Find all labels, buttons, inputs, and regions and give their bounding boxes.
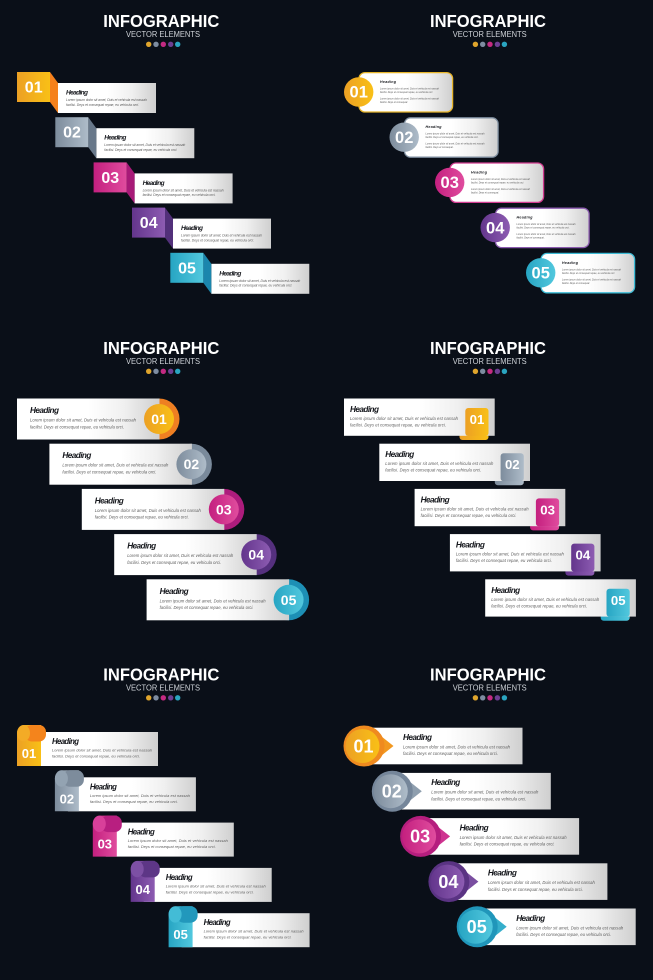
step 05: Lorem ipsum dolor sit amet, Duis et vehicula est nassah [204, 929, 304, 934]
step 02: facilisi. Deys et consequat repae, eu vehicula orci. [426, 136, 479, 139]
step 01: 01 [151, 411, 167, 427]
step 05: Lorem ipsum dolor sit amet, Duis et vehicula est nassah [160, 598, 266, 603]
panel: cards with scroll tabs [17, 664, 310, 947]
title block: INFOGRAPHIC [103, 664, 220, 684]
step 02: Heading [426, 125, 442, 129]
step 04: Lorem ipsum dolor sit amet, Duis et vehicula est nassah [488, 880, 596, 885]
step 05: 05 [532, 264, 550, 282]
step 03: facilisi. Deys et consequat repae, eu vehicula orci. [95, 515, 189, 520]
step 05: Heading [562, 261, 579, 265]
step 03: facilisi. Deys et consequat repae, eu vehicula orci. [460, 842, 555, 847]
step 01: Lorem ipsum dolor sit amet, Duis et vehicula est nassah [52, 748, 152, 752]
step 04: facilisi. Deys et consequat repae, eu vehicula orci. [516, 227, 570, 230]
step 02: Lorem ipsum dolor sit amet, Duis et vehicula est nassah [431, 790, 539, 795]
step 05: 05 [173, 927, 188, 942]
step 05: facilisi. Deys et consequat repae, eu vehicula orci. [562, 272, 615, 275]
step 02: facilisi. Deys et consequat repae, eu vehicula orci. [62, 469, 156, 474]
step 01 [344, 73, 453, 112]
step 04: Heading [181, 225, 203, 232]
step 05 [147, 579, 309, 620]
step 01: Lorem ipsum dolor sit amet, Duis et vehicula est nassah [350, 416, 459, 421]
step 02: facilisi. Deys et consequat. [426, 146, 454, 149]
step 04: 04 [248, 547, 264, 563]
step 03: 03 [441, 174, 459, 192]
step 05: Heading [204, 918, 231, 927]
step 01: 01 [350, 84, 368, 102]
title block [430, 11, 546, 47]
step 04: 04 [135, 882, 151, 897]
step 04: 04 [438, 872, 458, 892]
title block [103, 338, 220, 374]
step 04 [450, 534, 601, 576]
step 01: facilisi. Deys et consequat. [380, 101, 408, 104]
step 04: Lorem ipsum dolor sit amet, Duis et vehicula est nassah [516, 223, 576, 226]
step 04: Heading [127, 542, 156, 551]
title block: INFOGRAPHIC [103, 338, 220, 358]
step 02 [49, 444, 212, 485]
step 03 [435, 163, 544, 202]
step 05: 05 [281, 592, 297, 608]
step 01: Heading [30, 406, 59, 415]
title block: VECTOR ELEMENTS [453, 684, 527, 692]
step 05: facilisi. Deys et consequat repae, eu vehicula orci. [516, 932, 611, 937]
title block [103, 11, 220, 47]
step 05: Heading [491, 586, 520, 595]
step 05 [170, 253, 309, 294]
step 05 [457, 906, 636, 947]
step 02: Heading [431, 778, 460, 787]
step 01: Lorem ipsum dolor sit amet, Duis et vehicula est nassah [403, 744, 511, 750]
step 04: Lorem ipsum dolor sit amet, Duis et vehicula est nassah [127, 553, 234, 558]
title block: VECTOR ELEMENTS [126, 357, 200, 366]
step 01 [344, 726, 522, 766]
step 05: Lorem ipsum dolor sit amet, Duis et vehicula est nassah [516, 925, 624, 930]
step 01: Heading [350, 405, 379, 414]
step 03 [94, 162, 233, 203]
step 05 [169, 906, 310, 947]
step 04: Heading [166, 873, 193, 882]
step 03: Heading [421, 495, 450, 504]
step 03 [400, 816, 579, 857]
step 02: Heading [90, 782, 117, 791]
step 04: Lorem ipsum dolor sit amet, Duis et vehicula est nassah [516, 233, 576, 236]
step 02: Lorem ipsum dolor sit amet, Duis et vehicula est nassah [104, 143, 185, 147]
step 01: facilisi. Deys et consequat repae, eu vehicula orci. [350, 422, 446, 428]
step 05: facilisi. Deys et consequat repae, eu vehicula orci. [204, 935, 292, 940]
step 03: Heading [471, 170, 488, 174]
step 02: 02 [505, 457, 520, 472]
step 04: Heading [488, 869, 517, 878]
panel: stepped ribbon infographic [17, 11, 309, 294]
title block [103, 664, 220, 700]
step 01: Lorem ipsum dolor sit amet, Duis et vehicula est nassah [30, 418, 137, 422]
step 02 [390, 118, 498, 157]
title block: INFOGRAPHIC [430, 11, 546, 31]
step 03: Lorem ipsum dolor sit amet, Duis et vehicula est nassah [471, 178, 531, 181]
step 04: Heading [516, 216, 533, 220]
step 03: Lorem ipsum dolor sit amet, Duis et vehicula est nassah [421, 506, 529, 511]
step 04: facilisi. Deys et consequat repae, eu vehicula orci. [166, 889, 254, 894]
step 03: Lorem ipsum dolor sit amet, Duis et vehicula est nassah [460, 835, 567, 840]
step 01: facilisi. Deys et consequat repae, eu vehicula orci. [30, 424, 124, 429]
step 05: Lorem ipsum dolor sit amet, Duis et vehicula est nassah [562, 268, 622, 271]
title block: VECTOR ELEMENTS [126, 30, 200, 39]
step 03: facilisi. Deys et consequat repae, eu vehicula orci. [128, 844, 216, 849]
step 03: 03 [410, 827, 430, 847]
step 03: Heading [95, 496, 124, 505]
step 01: Heading [52, 737, 79, 746]
step 02 [372, 771, 551, 812]
step 04: facilisi. Deys et consequat repae, eu vehicula orci. [488, 887, 583, 892]
step 04 [132, 208, 271, 249]
step 03: Heading [128, 828, 155, 837]
step 03 [82, 489, 244, 530]
step 05: Lorem ipsum dolor sit amet, Duis et vehicula est nassah [562, 278, 622, 281]
step 05: 05 [467, 917, 487, 937]
panel: cards with rounded tag badges [344, 338, 636, 621]
step 01: 01 [22, 746, 36, 761]
step 01: Heading [380, 80, 397, 84]
step 03: facilisi. Deys et consequat. [471, 191, 499, 194]
step 05: facilisi. Deys et consequat. [562, 282, 590, 285]
step 02: facilisi. Deys et consequat repae, eu vehicula orci. [90, 799, 178, 804]
step 04: Lorem ipsum dolor sit amet, Duis et vehicula est nassah [181, 234, 262, 238]
step 01: facilisi. Deys et consequat repae, eu vehicula orci. [66, 103, 139, 107]
step 01: Lorem ipsum dolor sit amet, Duis et vehicula est nassah [380, 88, 440, 90]
step 02: facilisi. Deys et consequat repae, eu vehicula orci. [104, 148, 177, 152]
step 04: Lorem ipsum dolor sit amet, Duis et vehicula est nassah [166, 883, 266, 888]
step 03: Lorem ipsum dolor sit amet, Duis et vehicula est nassah [128, 838, 228, 843]
step 05: 05 [611, 593, 626, 608]
step 05: facilisi. Deys et consequat repae, eu vehicula orci. [491, 603, 587, 608]
step 03: Lorem ipsum dolor sit amet, Duis et vehicula est nassah [471, 188, 531, 191]
step 02: 02 [63, 125, 81, 142]
step 03: Heading [143, 180, 165, 187]
step 05: 05 [178, 260, 196, 277]
step 02: 02 [184, 456, 199, 472]
step 02: 02 [382, 781, 402, 801]
step 02: 02 [60, 791, 74, 806]
step 01: Lorem ipsum dolor sit amet, Duis et vehicula est nassah [66, 98, 147, 102]
step 03: 03 [540, 502, 555, 517]
panel: rounded outlined cards infographic [344, 11, 635, 293]
step 02 [55, 770, 196, 811]
step 01: facilisi. Deys et consequat repae, eu vehicula orci. [52, 754, 140, 758]
title block: VECTOR ELEMENTS [453, 357, 527, 366]
step 03 [415, 489, 565, 530]
title block: VECTOR ELEMENTS [126, 684, 200, 692]
step 02 [55, 117, 194, 158]
step 01 [344, 398, 495, 440]
step 04: facilisi. Deys et consequat repae, eu vehicula orci. [181, 238, 254, 242]
step 05: Heading [219, 270, 241, 277]
step 04: 04 [576, 548, 591, 563]
step 02: Lorem ipsum dolor sit amet, Duis et vehicula est nassah [426, 133, 485, 136]
step 05: facilisi. Deys et consequat repae, eu vehicula orci. [219, 284, 292, 288]
step 04: 04 [140, 215, 158, 232]
step 04: Heading [456, 541, 485, 550]
step 03 [93, 816, 234, 857]
step 01: Heading [66, 90, 88, 96]
step 01: facilisi. Deys et consequat repae, eu vehicula orci. [380, 91, 433, 94]
title block [430, 338, 546, 374]
step 05: Lorem ipsum dolor sit amet, Duis et vehicula est nassah [491, 597, 600, 602]
step 02: Heading [104, 135, 126, 142]
title block: VECTOR ELEMENTS [453, 30, 527, 39]
step 03: facilisi. Deys et consequat repae, eu vehicula orci. [471, 181, 524, 184]
step 02 [379, 444, 530, 485]
step 03: 03 [101, 170, 119, 187]
step 01 [17, 72, 156, 113]
step 05 [526, 253, 635, 293]
step 04: facilisi. Deys et consequat repae, eu vehicula orci. [456, 558, 552, 563]
panel: cards with half-ring number badges [17, 338, 309, 620]
step 04: 04 [486, 219, 505, 237]
step 04 [131, 861, 272, 902]
step 02: Heading [62, 451, 91, 460]
step 02: facilisi. Deys et consequat repae, eu vehicula orci. [431, 796, 526, 801]
step 04 [428, 861, 607, 902]
step 03: Lorem ipsum dolor sit amet, Duis et vehicula est nassah [143, 188, 224, 192]
step 03: facilisi. Deys et consequat repae, eu vehicula orci. [143, 193, 216, 197]
step 01 [17, 725, 158, 766]
panel: cards with pointer circle badges [344, 664, 636, 947]
title block: INFOGRAPHIC [103, 11, 220, 31]
step 03: facilisi. Deys et consequat repae, eu vehicula orci. [421, 513, 517, 518]
step 01: 01 [470, 412, 484, 427]
step 05: facilisi. Deys et consequat repae, eu vehicula orci. [160, 605, 254, 610]
step 01: 01 [353, 736, 374, 756]
title block: INFOGRAPHIC [430, 338, 546, 358]
step 05 [485, 579, 636, 621]
step 02: Lorem ipsum dolor sit amet, Duis et vehicula est nassah [90, 793, 190, 798]
step 01 [17, 398, 180, 440]
step 02: Lorem ipsum dolor sit amet, Duis et vehicula est nassah [426, 143, 485, 146]
step 04: Lorem ipsum dolor sit amet, Duis et vehicula est nassah [456, 552, 565, 557]
step 02: facilisi. Deys et consequat repae, eu vehicula orci. [385, 468, 481, 473]
step 01: 01 [25, 80, 43, 96]
step 05: Heading [516, 914, 545, 923]
step 02: Lorem ipsum dolor sit amet, Duis et vehicula est nassah [62, 463, 169, 468]
step 03: Heading [460, 823, 489, 832]
step 02: Lorem ipsum dolor sit amet, Duis et vehicula est nassah [385, 461, 494, 466]
step 01: Lorem ipsum dolor sit amet, Duis et vehicula est nassah [380, 98, 440, 100]
step 05: Heading [160, 587, 189, 596]
step 02: 02 [395, 129, 413, 147]
step 01: Heading [403, 733, 432, 742]
step 05: Lorem ipsum dolor sit amet, Duis et vehicula est nassah [219, 279, 300, 283]
step 04 [480, 208, 589, 248]
step 03: 03 [98, 837, 112, 852]
step 04: facilisi. Deys et consequat repae, eu vehicula orci. [127, 560, 221, 565]
title block [430, 664, 546, 700]
step 03: 03 [216, 501, 232, 517]
step 04: facilisi. Deys et consequat. [516, 237, 545, 240]
step 01: facilisi. Deys et consequat repae, eu vehicula orci. [403, 751, 498, 756]
step 04 [114, 534, 277, 575]
title block: INFOGRAPHIC [430, 664, 546, 684]
step 03: Lorem ipsum dolor sit amet, Duis et vehicula est nassah [95, 508, 201, 513]
step 02: Heading [385, 450, 414, 459]
